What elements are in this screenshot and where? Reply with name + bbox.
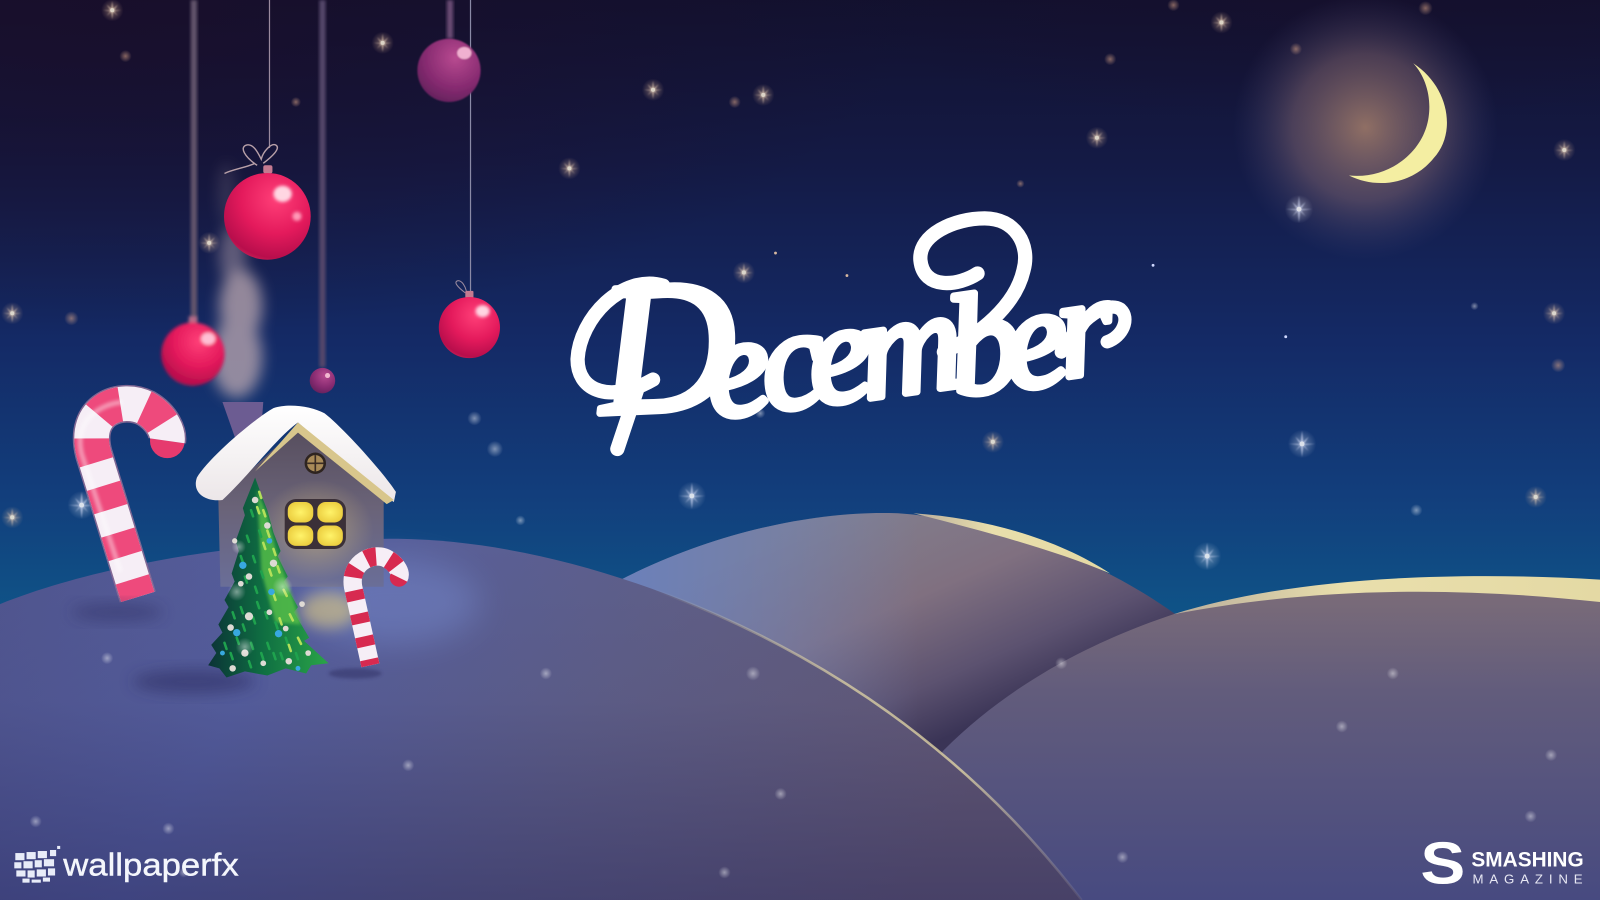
tree sparkles xyxy=(228,540,293,656)
right hill snow crest xyxy=(1173,576,1600,614)
roof snow xyxy=(196,406,396,502)
tree shadow on snow xyxy=(133,669,255,694)
tree needles bright xyxy=(257,492,301,651)
flourish on r xyxy=(1061,307,1125,352)
large candy cane xyxy=(80,402,185,597)
tree lit side xyxy=(257,490,301,624)
christmas tree xyxy=(208,478,329,678)
flourish tail xyxy=(617,388,638,449)
roof cream trim xyxy=(255,422,394,504)
ornament: large red bauble xyxy=(224,145,311,260)
candy cane highlight xyxy=(80,402,122,571)
ornament strings xyxy=(191,0,471,367)
magazine wordmark: MAGAZINE xyxy=(1472,872,1583,887)
small candy cane xyxy=(329,556,408,679)
wallpaperfx wordmark: wallpaperfx xyxy=(62,847,239,883)
lit window xyxy=(285,499,346,549)
title: December xyxy=(578,218,1125,454)
wallpaperfx checker icon xyxy=(14,846,60,883)
drifting snow dots xyxy=(30,652,1557,879)
background hill, middle xyxy=(602,513,1176,806)
house wall xyxy=(218,429,384,587)
logo: Smashing Magazine xyxy=(1420,830,1584,897)
window glow on wall xyxy=(259,480,373,582)
tree baubles blue xyxy=(220,538,300,671)
smoke from chimney xyxy=(211,163,262,398)
flourish on capital xyxy=(578,284,663,392)
ornament: small purple bauble xyxy=(310,368,335,393)
tree baubles silver xyxy=(227,497,311,672)
background hill, right xyxy=(898,576,1600,900)
crescent moon xyxy=(1349,63,1447,183)
tree needles mid xyxy=(224,510,298,667)
round attic window xyxy=(305,453,326,474)
flourish above b xyxy=(920,218,1025,352)
hill rim light xyxy=(398,539,1082,900)
chimney xyxy=(222,402,263,454)
moon glow xyxy=(1233,0,1498,260)
window light on snow xyxy=(300,592,357,629)
smashing S mark: S xyxy=(1420,830,1465,897)
stars xyxy=(1,0,1576,570)
title lettering: ecember xyxy=(695,244,1123,449)
ornament: blurred red bauble xyxy=(161,316,224,386)
title lettering: D xyxy=(590,238,740,454)
smashing wordmark: SMASHING xyxy=(1471,847,1584,871)
ornament: right red bauble xyxy=(439,281,500,358)
foreground hill xyxy=(0,539,1082,900)
hill sheen xyxy=(306,559,480,645)
middle hill snow crest xyxy=(913,513,1110,573)
gingerbread house xyxy=(196,402,396,587)
cane shadow on snow xyxy=(71,603,163,621)
logo: wallpaperfx xyxy=(14,846,239,883)
ornament: top purple bauble xyxy=(417,39,481,102)
